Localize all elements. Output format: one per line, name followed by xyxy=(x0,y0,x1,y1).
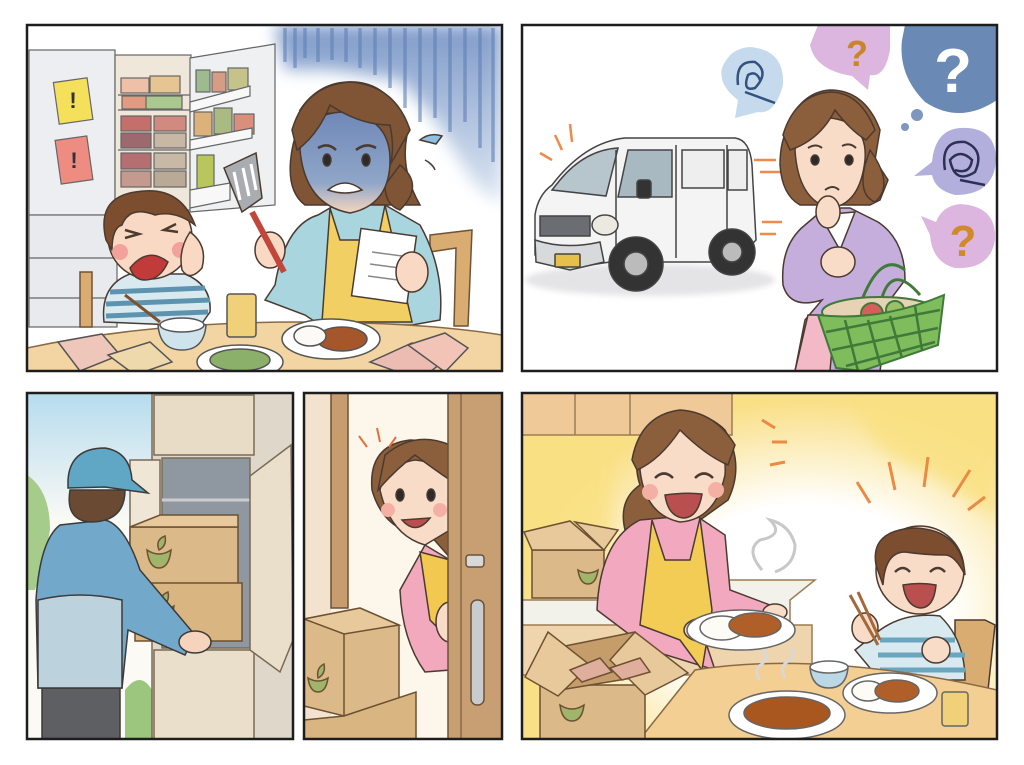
thought bubble: orange question xyxy=(921,204,995,268)
panel: worried mother watching delivery van xyxy=(522,25,997,371)
fridge xyxy=(29,44,275,327)
sky and bushes xyxy=(27,393,152,740)
background: blue gloom stripes xyxy=(275,25,502,205)
surprise marks xyxy=(359,428,396,447)
courier in blue jacket and cap xyxy=(36,448,211,740)
panel: happy mother serving curry to smiling boy xyxy=(522,393,997,739)
green shopping basket xyxy=(818,265,944,371)
panel: mother peeking from door at boxes xyxy=(304,393,502,739)
thought bubble: pink question xyxy=(810,25,890,90)
thought bubble: pink question: ? xyxy=(846,33,868,74)
door frame xyxy=(305,394,349,719)
thought bubble: blue question xyxy=(901,25,997,131)
cardboard boxes with leaf logo xyxy=(130,515,242,641)
woman peeking xyxy=(370,438,448,673)
fridge warning signs: ! xyxy=(69,88,77,113)
steam over curry xyxy=(756,648,793,680)
thought bubble: scribble xyxy=(721,47,783,118)
open meal kit box on table xyxy=(525,632,688,739)
orange excitement rays xyxy=(762,420,985,510)
dining table xyxy=(640,663,997,739)
dishes on table xyxy=(729,661,968,739)
yellow glow xyxy=(556,412,996,560)
dining table xyxy=(27,322,502,371)
boy crying xyxy=(104,191,210,326)
mother with spatula and notepad xyxy=(224,82,442,325)
woman in purple cardigan xyxy=(780,90,905,371)
kitchen cabinets and counter xyxy=(522,393,815,675)
mother in yellow apron xyxy=(597,410,787,670)
thought bubble: dark scribble xyxy=(914,128,996,195)
wooden chair xyxy=(80,230,472,327)
panel: courier placing boxes in delivery locker xyxy=(27,393,293,740)
motion lines near van xyxy=(540,124,782,234)
panel: stressed mother and crying boy at dinner table xyxy=(27,25,502,380)
sliding wooden door with handle xyxy=(448,393,502,739)
fridge warning signs: ! xyxy=(70,148,78,173)
thought bubble: blue question: ? xyxy=(934,37,972,106)
opened box on counter xyxy=(524,521,618,598)
white delivery van xyxy=(535,138,756,291)
thought bubble: orange question: ? xyxy=(950,217,976,266)
curry plate held by mother xyxy=(687,610,795,650)
table dishes: rice bowl, juice, curry plate, salad, meal trays xyxy=(58,294,468,380)
steam from pot xyxy=(753,520,795,572)
locker cabinet xyxy=(130,393,293,739)
fridge warning signs xyxy=(71,92,76,168)
van shadow xyxy=(525,264,775,296)
stacked boxes at the door xyxy=(304,608,416,739)
boy eating happily xyxy=(850,526,995,690)
